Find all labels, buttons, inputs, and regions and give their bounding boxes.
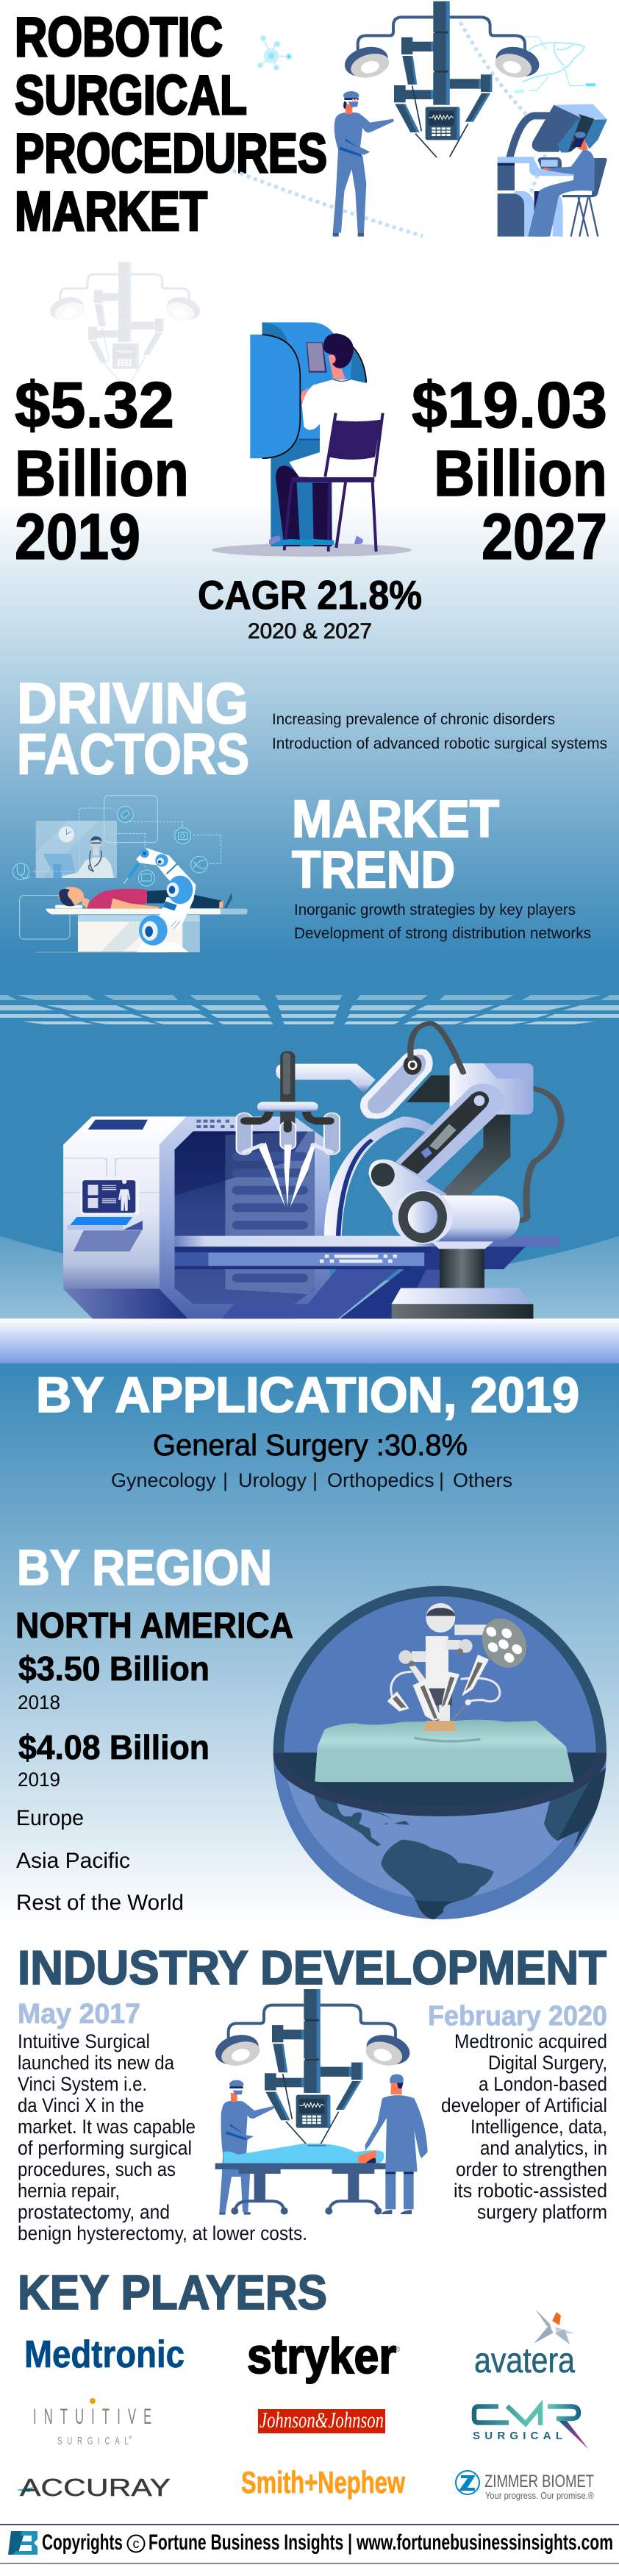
region data: Europe <box>16 1806 84 1830</box>
application list: Gynecology <box>111 1469 216 1491</box>
application list: Urology <box>238 1469 307 1491</box>
text block: May 2017: Vinci System i.e. <box>18 2073 147 2095</box>
application list: | <box>312 1469 318 1491</box>
text block: May 2017: launched its new da <box>18 2052 175 2074</box>
page background gradient <box>0 498 619 1927</box>
heading: market trend <box>292 791 499 899</box>
heading: driving factors: DRIVING <box>17 671 248 735</box>
logo: Intuitive Surgical: INTUITIVE <box>33 2405 151 2429</box>
icon: molecule <box>258 36 291 70</box>
heading: key players: KEY PLAYERS <box>18 2265 327 2319</box>
title: PROCEDURES <box>15 122 327 184</box>
text block: May 2017 <box>18 2030 307 2244</box>
icon: cyan organ outline <box>515 37 595 93</box>
logo: avatera <box>474 2309 575 2380</box>
text block: May 2017: procedures, such as <box>18 2158 176 2180</box>
CAGR <box>198 572 422 643</box>
market trend list: Development of strong distribution networks <box>294 925 591 942</box>
logo: Intuitive Surgical: SURGICAL <box>57 2435 129 2447</box>
heading: market trend: TREND <box>292 841 455 899</box>
CAGR years: 2020 & 2027 <box>248 619 372 643</box>
text block: February 2020: developer of Artificial <box>441 2094 607 2116</box>
application list: | <box>439 1469 444 1491</box>
date: May 2017: May 2017 <box>18 1999 140 2030</box>
illustration: globe with surgical robot <box>273 1586 607 1920</box>
footer copyright text: Copyrights <box>42 2530 123 2555</box>
icon: surgical robot (top) <box>341 1 543 157</box>
region data: $3.50 Billion <box>18 1649 210 1688</box>
region data: Asia Pacific <box>16 1849 130 1873</box>
left market size 2019: Billion <box>15 437 189 510</box>
title <box>15 6 327 242</box>
logo: stryker: stryker <box>247 2328 396 2384</box>
general surgery share: General Surgery :30.8% <box>153 1428 468 1462</box>
text block: May 2017: market. It was capable <box>18 2116 196 2138</box>
heading: driving factors <box>17 671 249 786</box>
right market size 2027: $19.03 <box>412 368 607 441</box>
icon: surgeon at console <box>212 322 412 557</box>
CAGR: CAGR 21.8% <box>198 572 422 618</box>
icon: surgeon standing <box>333 91 394 237</box>
logo: Johnson & Johnson: Johnson&Johnson <box>260 2407 384 2433</box>
heading: driving factors: FACTORS <box>17 721 249 786</box>
text block: May 2017: hernia repair, <box>18 2180 120 2202</box>
heading: industry development: INDUSTRY DEVELOPMENT <box>18 1941 607 1994</box>
heading: market trend: MARKET <box>292 791 499 849</box>
logo: CMR Surgical: SURGICAL <box>473 2430 562 2442</box>
text block: February 2020: a London-based <box>479 2073 607 2095</box>
logo: Accuray: ACCURAY <box>20 2474 171 2501</box>
application list: Orthopedics <box>327 1469 434 1491</box>
text block: May 2017: benign hysterectomy, at lower costs. <box>18 2222 307 2244</box>
title: MARKET <box>15 180 207 242</box>
text block: May 2017: prostatectomy, and <box>18 2201 170 2223</box>
icon: surgical robot with team <box>212 1989 428 2215</box>
logo: Intuitive Surgical: ® <box>129 2436 132 2441</box>
logo: Zimmer Biomet <box>456 2471 594 2501</box>
title: SURGICAL <box>15 64 247 126</box>
logo: Smith+Nephew: Smith+Nephew <box>241 2465 405 2500</box>
region data <box>15 1606 293 1915</box>
right market size 2027 <box>412 368 607 573</box>
driving factors list: Introduction of advanced robotic surgical systems <box>272 735 607 752</box>
ceiling light strips <box>0 995 619 1024</box>
icon: Fortune Business Insights logo <box>8 2531 37 2555</box>
text block: February 2020: its robotic-assisted <box>454 2180 607 2202</box>
dotted guide paths <box>233 22 545 236</box>
region data: $4.08 Billion <box>18 1728 210 1766</box>
footer copyright text: c <box>132 2536 140 2551</box>
text block: May 2017: of performing surgical <box>18 2137 192 2159</box>
date: February 2020: February 2020 <box>428 2001 607 2032</box>
heading: by application: BY APPLICATION, 2019 <box>36 1367 579 1423</box>
driving factors list: Increasing prevalence of chronic disorders <box>272 711 555 728</box>
left market size 2019: $5.32 <box>15 368 174 441</box>
region data: Rest of the World <box>16 1891 184 1915</box>
logo: CMR Surgical <box>473 2406 589 2450</box>
heading: by region: BY REGION <box>17 1540 272 1596</box>
market trend list <box>294 902 591 942</box>
market trend list: Inorganic growth strategies by key players <box>294 902 576 918</box>
icon: faded surgical robot <box>48 262 202 382</box>
text block: May 2017: Intuitive Surgical <box>18 2030 150 2052</box>
application list: Others <box>453 1469 512 1491</box>
icon: surgeon console <box>498 104 607 237</box>
text block: February 2020: Digital Surgery, <box>488 2052 607 2074</box>
logo: avatera: avatera <box>474 2341 575 2380</box>
logo: stryker: ® <box>395 2346 401 2354</box>
logo: Intuitive Surgical <box>33 2398 151 2447</box>
left market size 2019 <box>15 368 189 573</box>
left market size 2019: 2019 <box>15 500 140 573</box>
title: ROBOTIC <box>15 6 223 68</box>
illustration: robotic surgery machine <box>63 1024 561 1319</box>
text block: February 2020: order to strengthen <box>456 2158 607 2180</box>
text block: February 2020: and analytics, in <box>480 2137 607 2159</box>
application list: | <box>223 1469 228 1491</box>
region data: 2018 <box>18 1691 60 1713</box>
logo: Zimmer Biomet: Your progress. Our promise.® <box>485 2490 594 2501</box>
illustration: patient with robot arm <box>12 796 248 952</box>
region data: NORTH AMERICA <box>15 1606 293 1646</box>
driving factors list <box>272 711 607 752</box>
text block: February 2020 <box>441 2030 607 2223</box>
text block: February 2020: Medtronic acquired <box>454 2030 607 2052</box>
footer rules <box>0 2524 619 2563</box>
region data: 2019 <box>18 1769 60 1791</box>
text block: February 2020: surgery platform <box>477 2201 607 2223</box>
text block: May 2017: da Vinci X in the <box>18 2094 144 2116</box>
logo: Medtronic: Medtronic <box>24 2333 185 2376</box>
